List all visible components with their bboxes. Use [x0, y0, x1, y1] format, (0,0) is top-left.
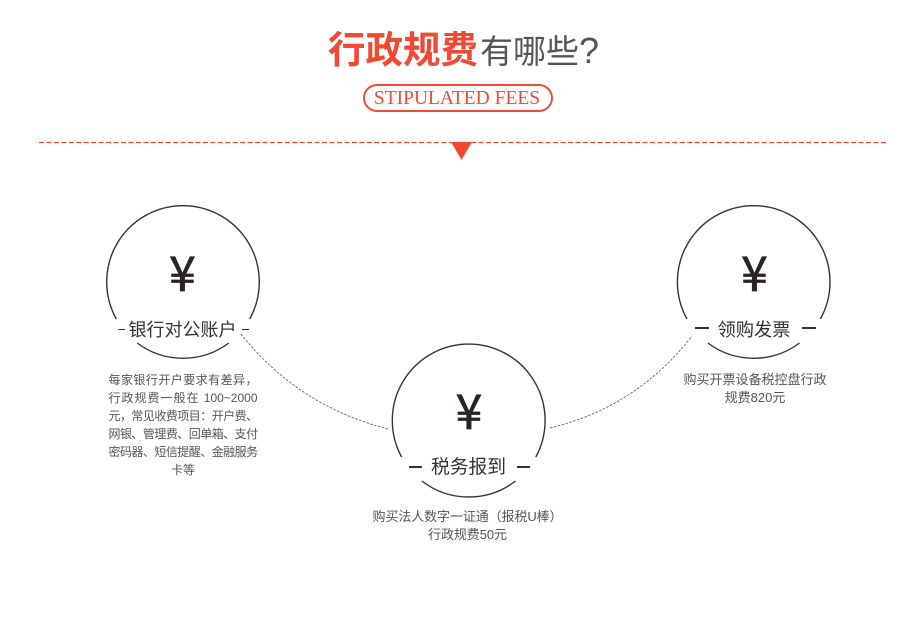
- label: 领购发票: [718, 319, 790, 340]
- icon: yen: ¥: [456, 373, 482, 443]
- description: 行政规费50元: [428, 527, 507, 542]
- description: [683, 372, 826, 405]
- description: [373, 509, 562, 542]
- panel: tax registration: [373, 343, 562, 542]
- circle outline: [392, 343, 546, 498]
- divider with triangle marker: [39, 142, 886, 160]
- panel: invoice: [676, 205, 831, 405]
- description: [108, 373, 258, 477]
- label: 银行对公账户: [128, 320, 236, 340]
- icon: yen: ¥: [741, 235, 768, 305]
- description: 网银、管理费、回单箱、支付: [108, 427, 258, 441]
- description: 卡等: [171, 463, 195, 477]
- circle outline: [106, 205, 260, 359]
- description: 购买开票设备税控盘行政: [683, 372, 826, 387]
- dashed connector: right: [550, 336, 692, 428]
- description: 行政规费一般在 100~2000: [108, 391, 258, 405]
- description: 元，常见收费项目：开户费、: [108, 409, 258, 423]
- description: 每家银行开户要求有差异，: [108, 373, 258, 387]
- description: 密码器、短信提醒、金融服务: [108, 445, 258, 459]
- description: 购买法人数字一证通（报税U棒）: [373, 509, 562, 524]
- dashed connector: left: [240, 334, 388, 430]
- label: 税务报到: [431, 456, 506, 477]
- icon: yen: ¥: [169, 235, 196, 305]
- subtitle pill: [363, 84, 553, 112]
- title highlight: 行政规费有哪些?: [328, 29, 599, 71]
- panel: bank account: [106, 205, 260, 477]
- description: 规费820元: [725, 390, 785, 405]
- subtitle pill: STIPULATED FEES: [374, 88, 540, 109]
- circle outline: [676, 205, 831, 359]
